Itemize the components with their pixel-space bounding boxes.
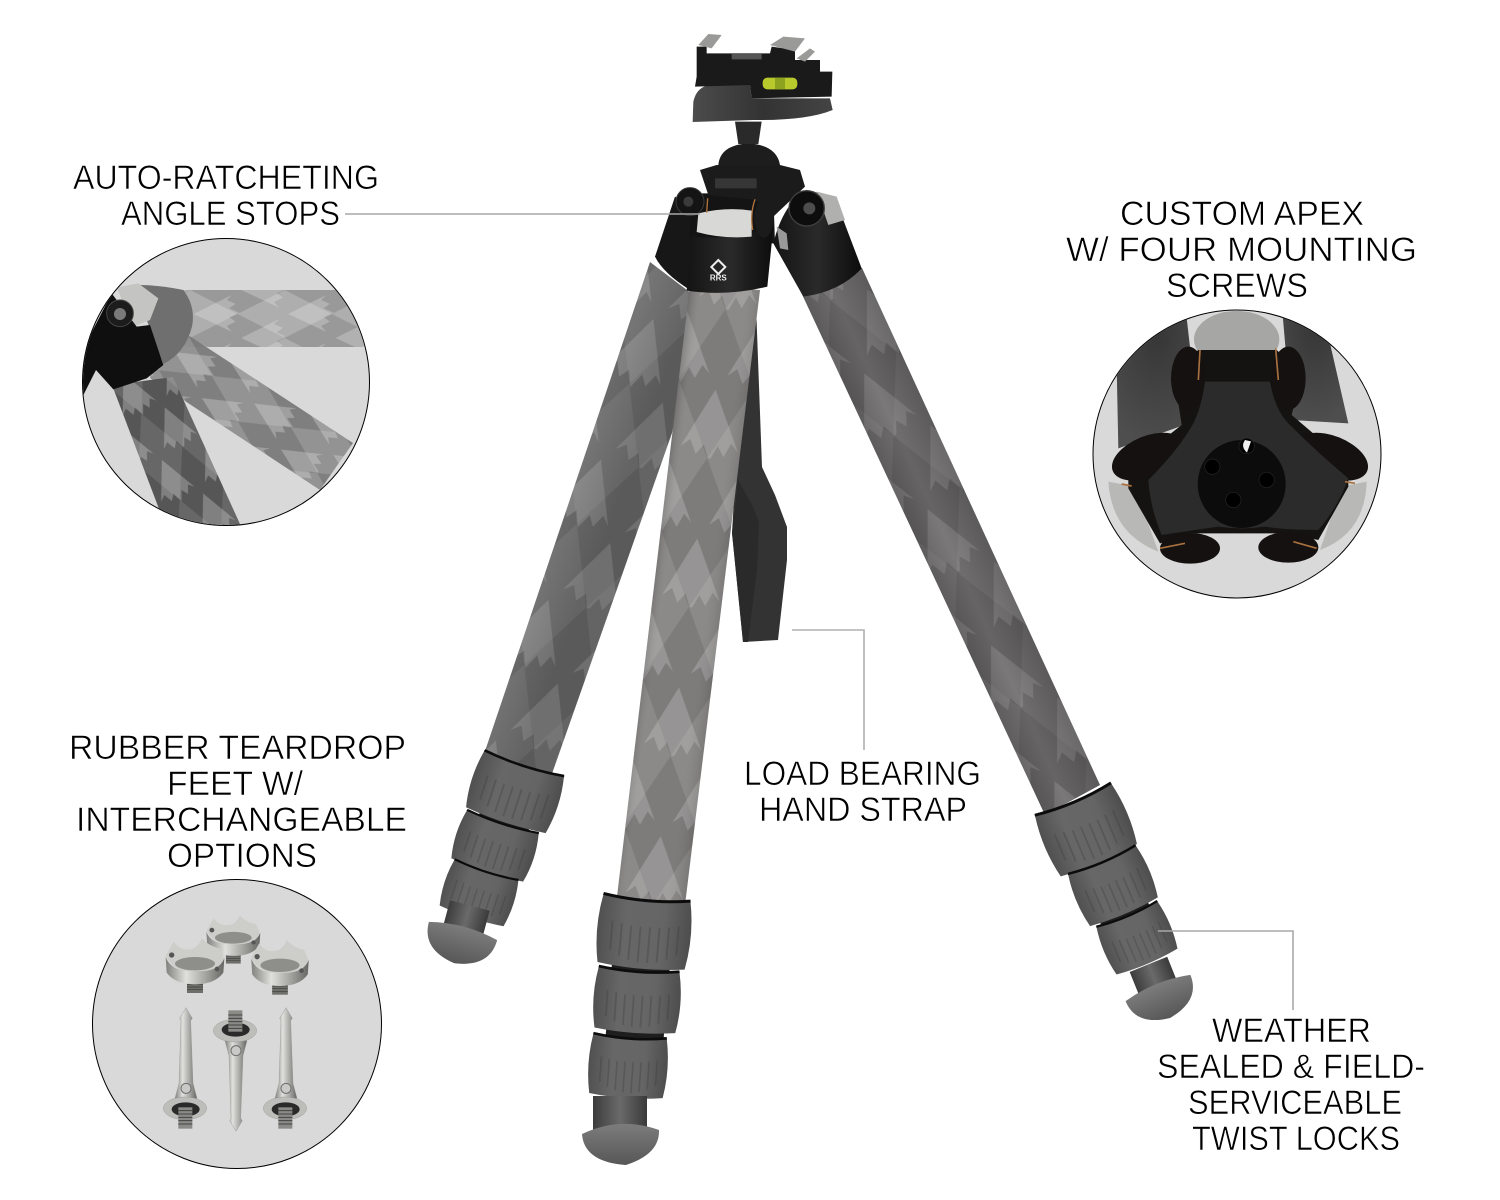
leader: angle stops [345,213,700,215]
left pin foot [163,1008,207,1129]
label: auto-ratcheting angle stops [73,159,379,233]
label: load bearing hand strap: LOAD BEARING [744,755,981,793]
left leg rubber foot [420,896,504,972]
inset photo: legs at angle stops [80,283,380,535]
label: weather sealed twist locks: SERVICEABLE [1188,1084,1402,1122]
label: custom apex: W/ FOUR MOUNTING [1066,231,1417,269]
label: load bearing hand strap [744,755,981,829]
centre knob [755,199,773,238]
clamp lower plate [693,85,833,122]
label: rubber teardrop feet [69,729,407,875]
centre collar [687,227,773,293]
ball head dome [718,143,780,165]
apex body [700,165,805,217]
right pin foot [263,1008,307,1129]
back crown foot [206,915,260,964]
left leg inner tube [472,790,515,915]
centre leg carbon tube [616,285,760,905]
label: auto-ratcheting angle stops: ANGLE STOPS [121,195,340,233]
clamp body [695,47,832,98]
right leg carbon tube [800,268,1100,815]
knob [107,300,133,327]
apex backing [690,193,775,243]
ghost leg horizontal [180,290,380,347]
centre leg twist locks [586,893,694,1101]
quick release clamp and apex [655,34,862,297]
right knob [789,191,824,226]
left hub [655,197,697,290]
left crown foot [166,938,224,993]
label: weather sealed twist locks: SEALED & FIELD- [1157,1048,1425,1086]
label: rubber teardrop feet: FEET W/ [167,765,303,803]
inset: custom apex [1093,303,1381,598]
label: custom apex: SCREWS [1166,267,1308,305]
middle pin foot [213,1010,257,1131]
solid leg [114,377,240,525]
centre leg inner tube [630,930,644,1090]
inset: teardrop feet [92,880,382,1168]
left leg [420,262,700,972]
right leg inner tube [1086,830,1146,960]
black hub [83,294,164,395]
centre leg rubber foot [582,1096,659,1165]
right leg rubber foot [1116,951,1203,1031]
left leg twist locks [437,749,567,929]
silver stop [117,283,158,327]
label: rubber teardrop feet: RUBBER TEARDROP [69,729,406,767]
rounded leg knobs [1105,347,1375,564]
label: weather sealed twist locks: WEATHER [1212,1012,1371,1050]
copper accents [707,198,755,230]
inset: angle stops [80,238,380,535]
mount socket [1198,440,1286,528]
load bearing hand strap [732,305,787,642]
right leg twist locks [1032,782,1181,978]
right leg [800,268,1203,1031]
label: custom apex [1066,195,1417,305]
leader: twist locks [1158,931,1293,1010]
silver side bulbs [1108,482,1158,552]
grey stop cap [140,285,193,364]
silver bulb [1194,311,1280,350]
ghost leg diagonal [150,320,353,490]
hole glints [1243,440,1251,453]
silver leg stop block [697,209,752,237]
label: rubber teardrop feet: INTERCHANGEABLE [76,801,407,839]
silver right stop [817,192,845,225]
bubble level [763,78,797,89]
inset photo: apex underside [1105,303,1375,564]
tripod product photo [420,34,1203,1165]
label: rubber teardrop feet: OPTIONS [167,837,317,875]
RRS logo: RRS [710,274,727,283]
right crown foot [251,940,309,995]
left leg carbon tube [482,262,700,785]
leader: hand strap [792,630,864,750]
black silhouette [1128,350,1348,543]
screw holes [1205,438,1274,508]
central body [1148,382,1348,535]
ball neck [735,122,762,144]
label: load bearing hand strap: HAND STRAP [759,791,967,829]
dark tubes [1116,320,1190,448]
centre leg [582,285,760,1165]
left knob [676,188,704,216]
RRS logo [710,260,727,283]
label: auto-ratcheting angle stops: AUTO-RATCHETING [73,159,379,197]
label: weather sealed twist locks [1157,1012,1425,1158]
right hub [773,190,862,297]
label: custom apex: CUSTOM APEX [1120,195,1364,233]
clamp jaws [698,34,815,62]
label: weather sealed twist locks: TWIST LOCKS [1192,1120,1400,1158]
copper edges [1122,348,1355,548]
